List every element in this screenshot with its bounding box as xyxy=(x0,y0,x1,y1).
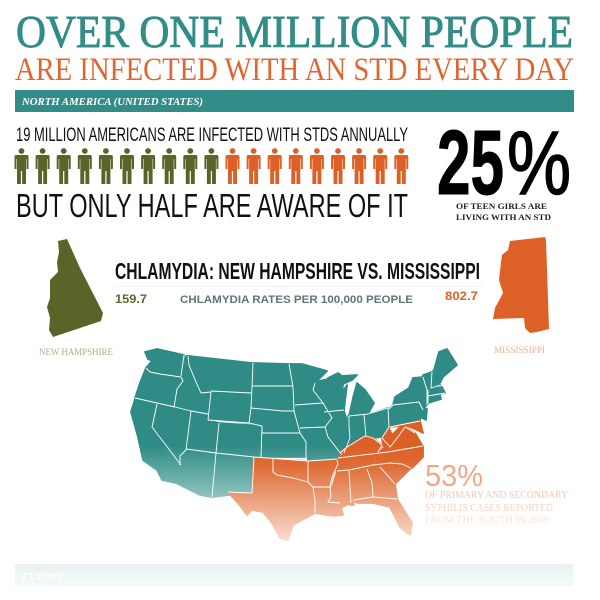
icons: nine orange people xyxy=(226,148,408,184)
icons: ten olive people xyxy=(14,148,218,184)
section bar: europe: EUROPE xyxy=(21,572,65,583)
label: new hampshire: NEW HAMPSHIRE xyxy=(39,348,113,358)
map: state borders xyxy=(135,355,445,513)
caption: syphilis xyxy=(425,490,568,526)
caption: syphilis: OF PRIMARY AND SECONDARY xyxy=(425,490,568,501)
label: mississippi: MISSISSIPPI xyxy=(494,346,545,356)
text: 19 million americans: 19 MILLION AMERICANS ARE INFECTED WITH STDS ANNUALLY xyxy=(16,124,408,146)
text: only half aware: BUT ONLY HALF ARE AWARE OF IT xyxy=(16,188,408,225)
value: new hampshire rate: 159.7 xyxy=(115,292,147,306)
stat: 25 percent: % xyxy=(507,114,571,214)
caption: teen girls: OF TEEN GIRLS ARE xyxy=(456,201,547,211)
section bar: europe xyxy=(15,564,573,586)
stat: 25 percent: 25 xyxy=(437,112,504,214)
map: united states xyxy=(131,349,457,540)
stat: 53 percent: 53% xyxy=(425,458,483,493)
icon: new hampshire xyxy=(47,239,103,337)
map: teal states xyxy=(131,349,457,497)
section bar: north america: NORTH AMERICA (UNITED STATES) xyxy=(21,97,203,108)
section bar: north america xyxy=(15,90,574,112)
value: mississippi rate: 802.7 xyxy=(445,289,478,303)
caption: syphilis: SYPHILIS CASES REPORTED xyxy=(425,503,553,514)
icon: mississippi xyxy=(493,237,549,333)
map: orange southern states xyxy=(228,421,423,540)
caption: teen girls xyxy=(456,201,551,222)
label: rates: CHLAMYDIA RATES PER 100,000 PEOPLE xyxy=(180,294,413,306)
caption: syphilis: FROM THE SOUTH IN 2009 xyxy=(425,515,549,526)
caption: teen girls: LIVING WITH AN STD xyxy=(456,212,551,222)
